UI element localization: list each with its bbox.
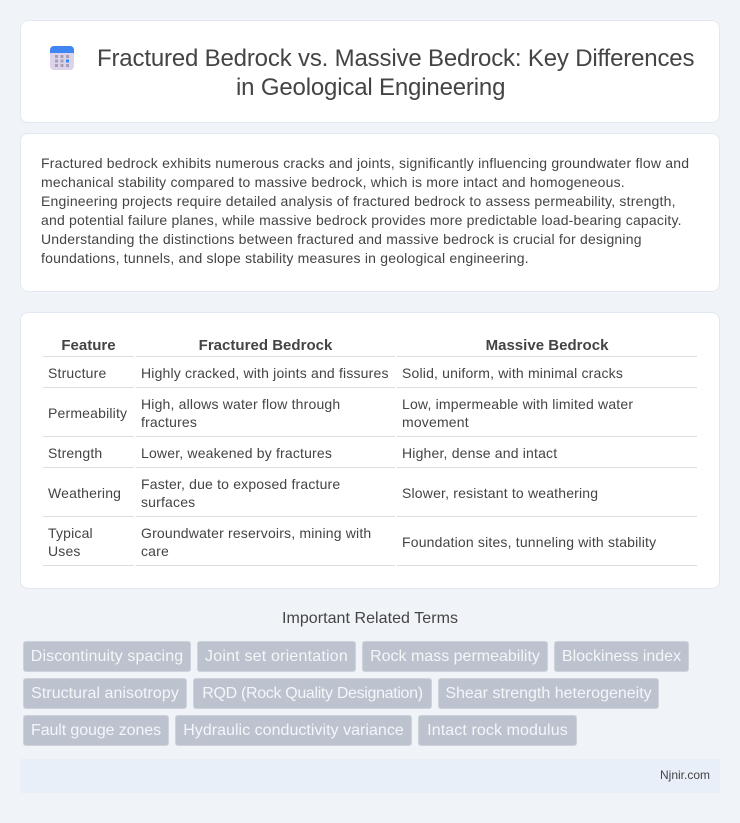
intro text: mechanical stability compared to massive bedrock, which is more intact and homogeneous. [41,174,625,190]
tag [554,641,689,672]
tag: Intact rock modulus [427,722,568,739]
tag: Shear strength heterogeneity [445,685,652,702]
intro text: Fractured bedrock exhibits numerous cracks and joints, significantly influencing groundwater flow and [41,155,689,171]
intro text: Engineering projects require detailed analysis of fractured bedrock to assess permeability, strength, [41,193,676,209]
icon: calendar [50,46,74,70]
text: Foundation sites, tunneling with stability [402,534,656,550]
text: care [141,543,169,559]
table header: Feature [61,337,116,354]
tag [193,678,432,709]
intro text: foundations, tunnels, and slope stability measures in geological engineering. [41,250,529,266]
tag: Discontinuity spacing [31,648,183,665]
row: typical uses [48,525,93,559]
text: Low, impermeable with limited water [402,396,633,412]
tag [418,715,577,746]
table header: Fractured Bedrock [199,337,332,354]
title: in Geological Engineering [236,74,505,101]
title [97,45,694,101]
row: strength: Strength [48,445,102,461]
panel: title card [20,20,720,123]
intro text [41,155,689,266]
text: fractures [141,414,197,430]
tag: Joint set orientation [205,648,348,665]
intro text: Understanding the distinctions between fractured and massive bedrock is crucial for designing [41,231,642,247]
panel: intro card [20,133,720,292]
text: movement [402,414,469,430]
tag [438,678,659,709]
tag [23,678,187,709]
tag: Fault gouge zones [31,722,161,739]
table header: Massive Bedrock [486,337,608,354]
text: Higher, dense and intact [402,445,557,461]
tag [23,715,169,746]
panel: comparison table [20,312,720,589]
row: structure: Structure [48,365,106,381]
tag: Structural anisotropy [31,685,179,702]
text: surfaces [141,494,195,510]
tag [175,715,412,746]
tag: Hydraulic conductivity variance [183,722,404,739]
text: Solid, uniform, with minimal cracks [402,365,623,381]
intro text: and potential failure planes, while massive bedrock provides more predictable load-bearing capacity. [41,212,682,228]
text: Groundwater reservoirs, mining with [141,525,371,541]
tag: Blockiness index [562,648,681,665]
row: typical uses: Typical [48,525,93,541]
row: permeability: Permeability [48,405,127,421]
text: Slower, resistant to weathering [402,485,598,501]
tag [23,641,191,672]
text: Faster, due to exposed fracture [141,476,340,492]
footer bar [20,759,720,793]
tag: RQD (Rock Quality Designation) [202,685,423,702]
title: Fractured Bedrock vs. Massive Bedrock: Key Differences [97,45,694,72]
text: Highly cracked, with joints and fissures [141,365,389,381]
tag [362,641,548,672]
tag [197,641,356,672]
row: weathering: Weathering [48,485,121,501]
heading: related terms: Important Related Terms [282,610,458,627]
row: typical uses: Uses [48,543,81,559]
text: High, allows water flow through [141,396,340,412]
tag: Rock mass permeability [370,648,540,665]
footer credit: Njnir.com [660,768,710,782]
text: Lower, weakened by fractures [141,445,332,461]
